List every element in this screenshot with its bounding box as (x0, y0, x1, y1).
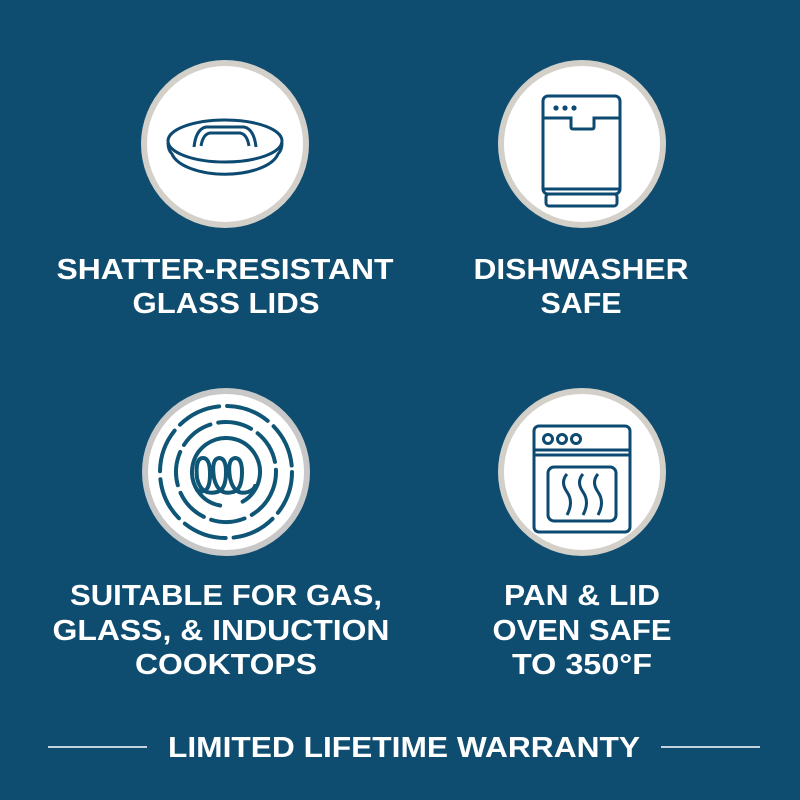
heading: oven safe: PAN & LID (504, 580, 660, 612)
heading: cooktops line 2: GLASS, & INDUCTION (52, 615, 390, 647)
heading: oven safe line 3: TO 350°F (512, 649, 652, 681)
icon: cooktop coil (145, 391, 307, 553)
heading: cooktops line 3: COOKTOPS (135, 649, 317, 681)
icon: dishwasher (501, 63, 663, 225)
heading: dishwasher line 2: SAFE (540, 288, 622, 320)
icon: oven (501, 391, 663, 553)
icon: glass lid (144, 63, 306, 225)
footer: warranty: LIMITED LIFETIME WARRANTY (168, 732, 640, 764)
heading: glass lids line 2: GLASS LIDS (132, 288, 320, 320)
heading: glass lids: SHATTER-RESISTANT (56, 254, 394, 286)
heading: cooktops: SUITABLE FOR GAS, (70, 580, 382, 612)
heading: dishwasher: DISHWASHER (474, 254, 689, 286)
heading: oven safe line 2: OVEN SAFE (492, 615, 672, 647)
